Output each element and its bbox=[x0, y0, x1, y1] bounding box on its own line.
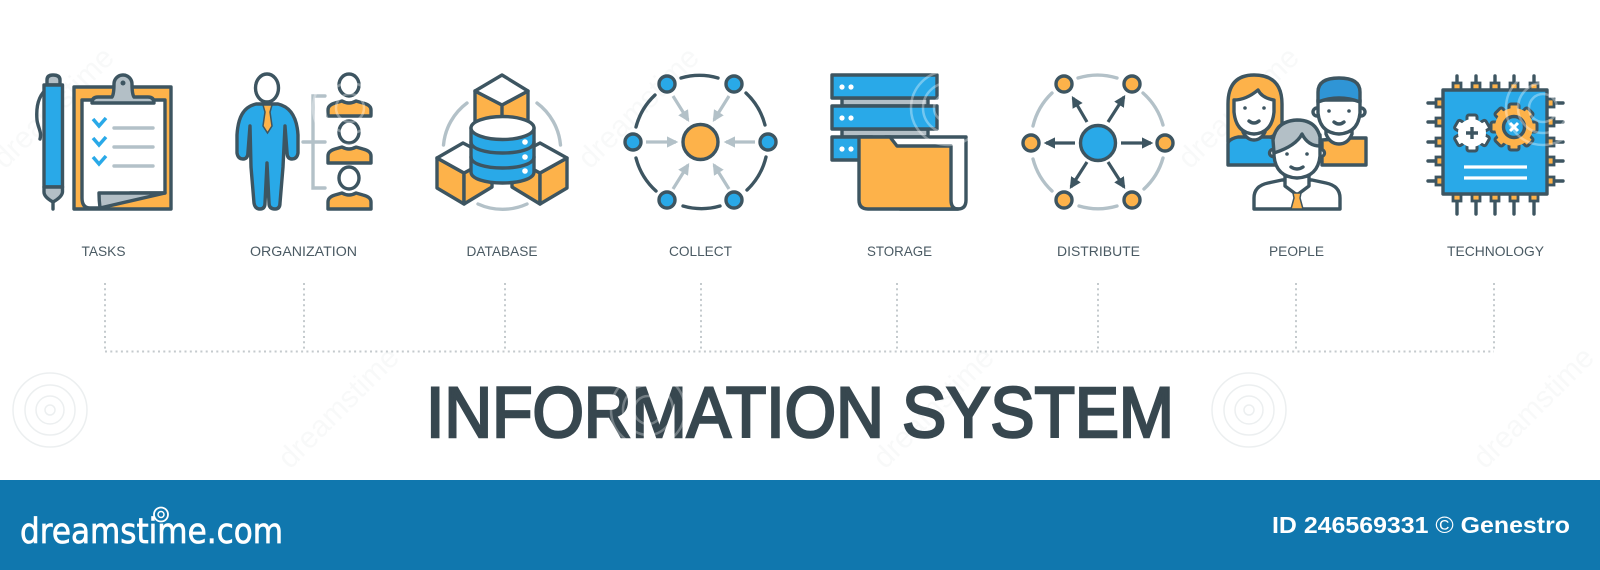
ring arcs bbox=[1033, 75, 1163, 209]
icon: organization bbox=[237, 74, 371, 209]
footer band bbox=[0, 480, 1600, 570]
center node bbox=[1080, 126, 1116, 160]
label: technology: TECHNOLOGY bbox=[1447, 243, 1545, 259]
icon: pen bbox=[37, 75, 62, 209]
label: storage: STORAGE bbox=[867, 243, 932, 259]
footer credit: ID 246569331 © Genestro bbox=[1272, 512, 1570, 538]
icon: database cylinder bbox=[471, 116, 534, 183]
icon: man in shirt and tie bbox=[1254, 120, 1340, 209]
folder bbox=[859, 137, 966, 209]
watermark text bbox=[0, 41, 1600, 475]
icon: technology bbox=[1428, 76, 1563, 214]
label: collect: COLLECT bbox=[669, 243, 732, 259]
center node bbox=[683, 124, 718, 160]
icon: storage bbox=[832, 75, 966, 209]
dotted connector bbox=[105, 283, 1494, 352]
icon: main figure bbox=[237, 74, 298, 209]
server rack bbox=[832, 75, 937, 160]
arrows pointing outward bbox=[1046, 97, 1151, 187]
icon: three team members bbox=[328, 74, 371, 209]
icon: left cube bbox=[437, 143, 492, 204]
chip body bbox=[1443, 90, 1547, 194]
grey arcs bbox=[444, 103, 560, 209]
icon: tasks bbox=[37, 75, 171, 209]
title: INFORMATION SYSTEM bbox=[426, 374, 1174, 453]
icon: orange gear bbox=[1491, 104, 1537, 150]
label: distribute: DISTRIBUTE bbox=[1057, 243, 1140, 259]
watermark text: dreamstime bbox=[867, 341, 1001, 475]
chip pins bbox=[1428, 76, 1563, 214]
icon: distribute bbox=[1023, 75, 1173, 209]
icon: clipboard bbox=[74, 75, 171, 209]
icon: woman bbox=[1228, 75, 1282, 165]
icon: right cube bbox=[512, 143, 567, 204]
watermark text: dreamstime bbox=[572, 41, 706, 175]
watermark text: dreamstime bbox=[272, 341, 406, 475]
watermark spirals bbox=[13, 71, 1580, 447]
watermark text: dreamstime bbox=[1172, 41, 1306, 175]
arrows pointing inward bbox=[646, 96, 755, 189]
chip text lines bbox=[1464, 167, 1527, 178]
outer nodes bbox=[625, 76, 776, 208]
label: tasks: TASKS bbox=[82, 243, 126, 259]
label: people: PEOPLE bbox=[1269, 243, 1324, 259]
icon: people bbox=[1228, 75, 1366, 209]
ring arcs bbox=[636, 75, 766, 209]
footer logo: dreamstime.com bbox=[20, 512, 283, 552]
outer nodes bbox=[1023, 76, 1173, 208]
icon: collect bbox=[625, 75, 776, 209]
watermark text: dreamstime bbox=[1467, 341, 1600, 475]
label: database: DATABASE bbox=[466, 243, 538, 259]
org bracket bbox=[303, 96, 325, 188]
label: organization: ORGANIZATION bbox=[250, 243, 357, 259]
icon: top cube bbox=[475, 75, 528, 125]
icon: database bbox=[437, 75, 567, 209]
icon: man with cap bbox=[1313, 78, 1366, 165]
icon: white gear bbox=[1454, 115, 1490, 151]
